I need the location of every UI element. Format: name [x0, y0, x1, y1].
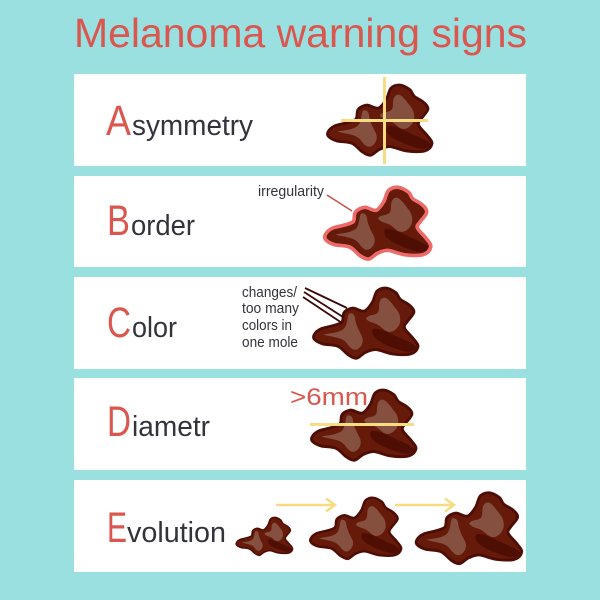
icon: mole with pointer lines: [303, 287, 419, 359]
heading: border: [107, 197, 195, 245]
icon: mole with diameter line: [310, 389, 417, 461]
arrow: small to medium: [276, 498, 335, 512]
icon: mole with highlighted border: [325, 187, 431, 259]
label: changes: too many: [242, 301, 300, 317]
heading: diametr: iametr: [132, 411, 210, 443]
heading: border: B: [107, 197, 130, 245]
label: changes: one mole: [242, 335, 298, 351]
heading: color: olor: [132, 312, 177, 344]
label: changes: [242, 285, 300, 351]
panel: diameter: [74, 378, 526, 470]
heading: diametr: [107, 398, 210, 446]
heading: evolution: [107, 504, 226, 552]
heading: evolution: volution: [127, 517, 226, 549]
heading: border: order: [131, 210, 195, 242]
icon: large mole: [415, 492, 522, 564]
icon: small mole: [236, 517, 293, 556]
heading: asymmetry: symmetry: [132, 110, 253, 142]
heading: color: C: [107, 299, 131, 347]
panel: color: [74, 277, 526, 369]
label: >6mm: >6mm: [290, 384, 368, 411]
heading: asymmetry: A: [106, 97, 131, 145]
icon: mole with symmetry axes: [327, 77, 433, 164]
arrow: medium to large: [395, 498, 454, 512]
title: Melanoma warning signs: [74, 10, 527, 56]
heading: color: [107, 299, 177, 347]
heading: evolution: E: [107, 504, 127, 552]
icon: medium mole: [310, 497, 402, 560]
panel: border: [74, 176, 526, 267]
label: changes: colors in: [242, 318, 292, 334]
label: changes: changes/: [242, 285, 298, 301]
panel: evolution: [74, 480, 526, 572]
label: irregularity: irregularity: [258, 184, 325, 200]
heading: asymmetry: [106, 97, 253, 145]
pointer line: [327, 195, 352, 211]
heading: diametr: D: [107, 398, 131, 446]
panel: asymmetry: [74, 74, 526, 166]
